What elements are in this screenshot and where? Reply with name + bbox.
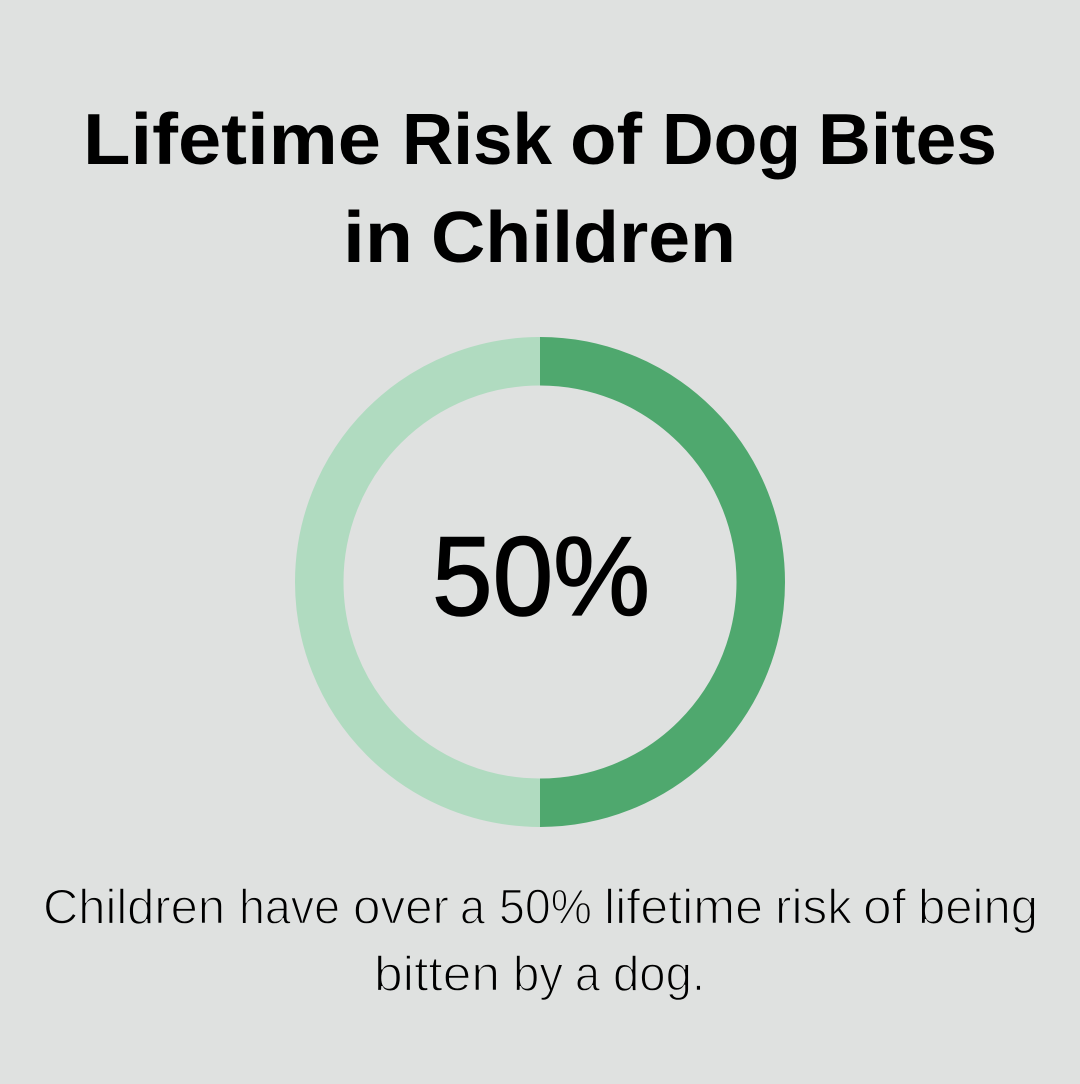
description: lifetime xyxy=(604,880,763,934)
description: Children xyxy=(43,880,225,934)
description: have xyxy=(239,880,340,934)
title xyxy=(83,100,997,278)
title: Lifetime xyxy=(83,100,381,180)
description: bitten xyxy=(374,948,500,1002)
description: by xyxy=(513,948,563,1002)
description: being xyxy=(918,880,1038,934)
title: Risk xyxy=(402,100,553,180)
title: in xyxy=(343,198,413,278)
description: a xyxy=(575,948,601,1002)
description: a xyxy=(460,880,486,934)
ring segment: remaining 50% xyxy=(319,361,540,803)
description: of xyxy=(863,880,906,934)
title: Bites xyxy=(818,100,997,180)
description: dog. xyxy=(613,948,705,1002)
ring segment: highlighted 50% xyxy=(540,361,761,803)
title: Children xyxy=(431,198,736,278)
description: over xyxy=(353,880,449,934)
title: of xyxy=(570,100,643,180)
description: 50% xyxy=(499,880,592,934)
description xyxy=(43,880,1038,1002)
description: risk xyxy=(775,880,852,934)
title: Dog xyxy=(662,100,801,180)
donut chart: 50% xyxy=(319,361,761,803)
center value: 50% xyxy=(432,514,650,639)
